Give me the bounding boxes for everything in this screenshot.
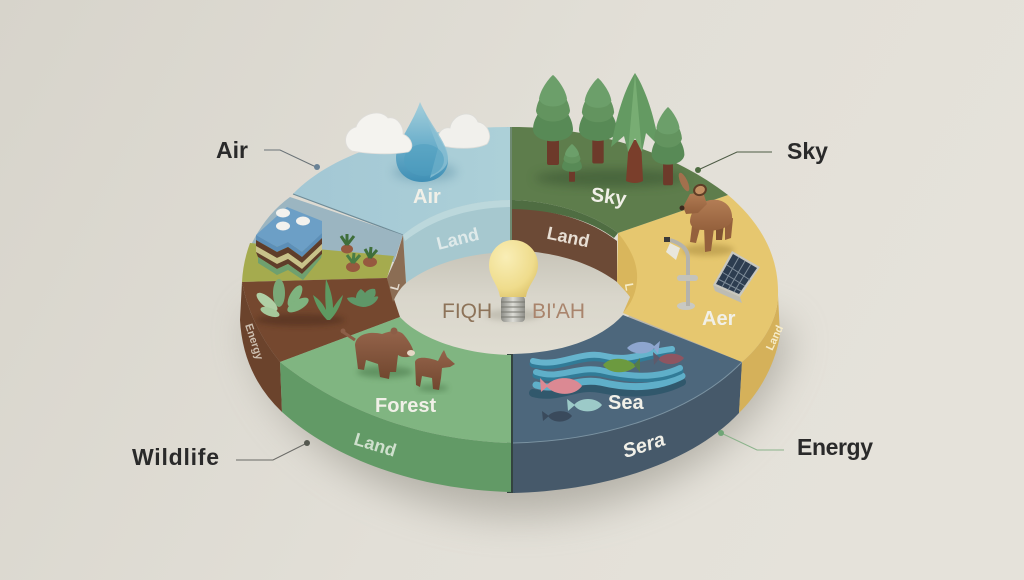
icon: fish	[540, 341, 684, 422]
icon: plants	[254, 279, 378, 326]
icon: waves	[533, 349, 682, 395]
callout: energy: Energy	[797, 434, 873, 460]
sector labels: L	[387, 281, 403, 292]
icon: light bulb	[485, 240, 541, 322]
sector: forest	[280, 317, 511, 492]
sector labels: Sky	[589, 184, 629, 211]
sector seams	[507, 127, 515, 493]
ring diagram	[240, 127, 780, 493]
callout: wildlife	[132, 440, 310, 470]
callout: air	[216, 137, 320, 170]
icon: large cow	[340, 328, 415, 379]
sector labels: Sea	[608, 392, 644, 414]
sector: aer	[617, 195, 780, 413]
callout: energy	[718, 430, 873, 460]
icon: tall folded tree	[611, 73, 659, 183]
icon: trees	[533, 73, 685, 187]
icon: water drop	[396, 102, 448, 182]
sector labels: L	[622, 282, 637, 292]
ground shadow	[250, 300, 790, 515]
sector: air	[293, 127, 510, 283]
icon: solar panel	[713, 251, 760, 303]
sector labels: Land	[545, 223, 591, 251]
icon: small calf	[415, 350, 455, 392]
callout: air: Air	[216, 137, 248, 163]
icon: lamp	[664, 237, 698, 310]
callout: sky	[695, 138, 828, 173]
text: bi'ah: BI'AH	[532, 300, 585, 323]
sector: land terrain	[240, 197, 406, 412]
icon: right cloud	[438, 114, 490, 148]
callout: sky: Sky	[787, 138, 828, 164]
sector labels: Forest	[375, 395, 436, 417]
sector labels: Air	[413, 186, 441, 208]
sector labels: Land	[764, 324, 786, 352]
sector labels: Sera	[620, 429, 668, 463]
icon: terrain stack	[256, 207, 322, 280]
center title	[442, 300, 585, 323]
icon: sprouts	[341, 234, 377, 272]
text: fiqh: FIQH	[442, 300, 492, 323]
icon: left cloud	[346, 113, 412, 154]
sector: sea	[513, 315, 742, 493]
sector labels: Aer	[702, 308, 736, 330]
sector labels: Land	[434, 224, 481, 254]
icon: deer	[677, 171, 734, 256]
sector labels: Energy	[242, 322, 265, 362]
hole floor	[388, 247, 632, 359]
sector labels: Land	[352, 429, 399, 461]
callout: wildlife: Wildlife	[132, 444, 219, 470]
sector: sky	[512, 127, 728, 282]
sector labels	[242, 184, 786, 463]
icon: clouds and water drop	[346, 102, 490, 182]
